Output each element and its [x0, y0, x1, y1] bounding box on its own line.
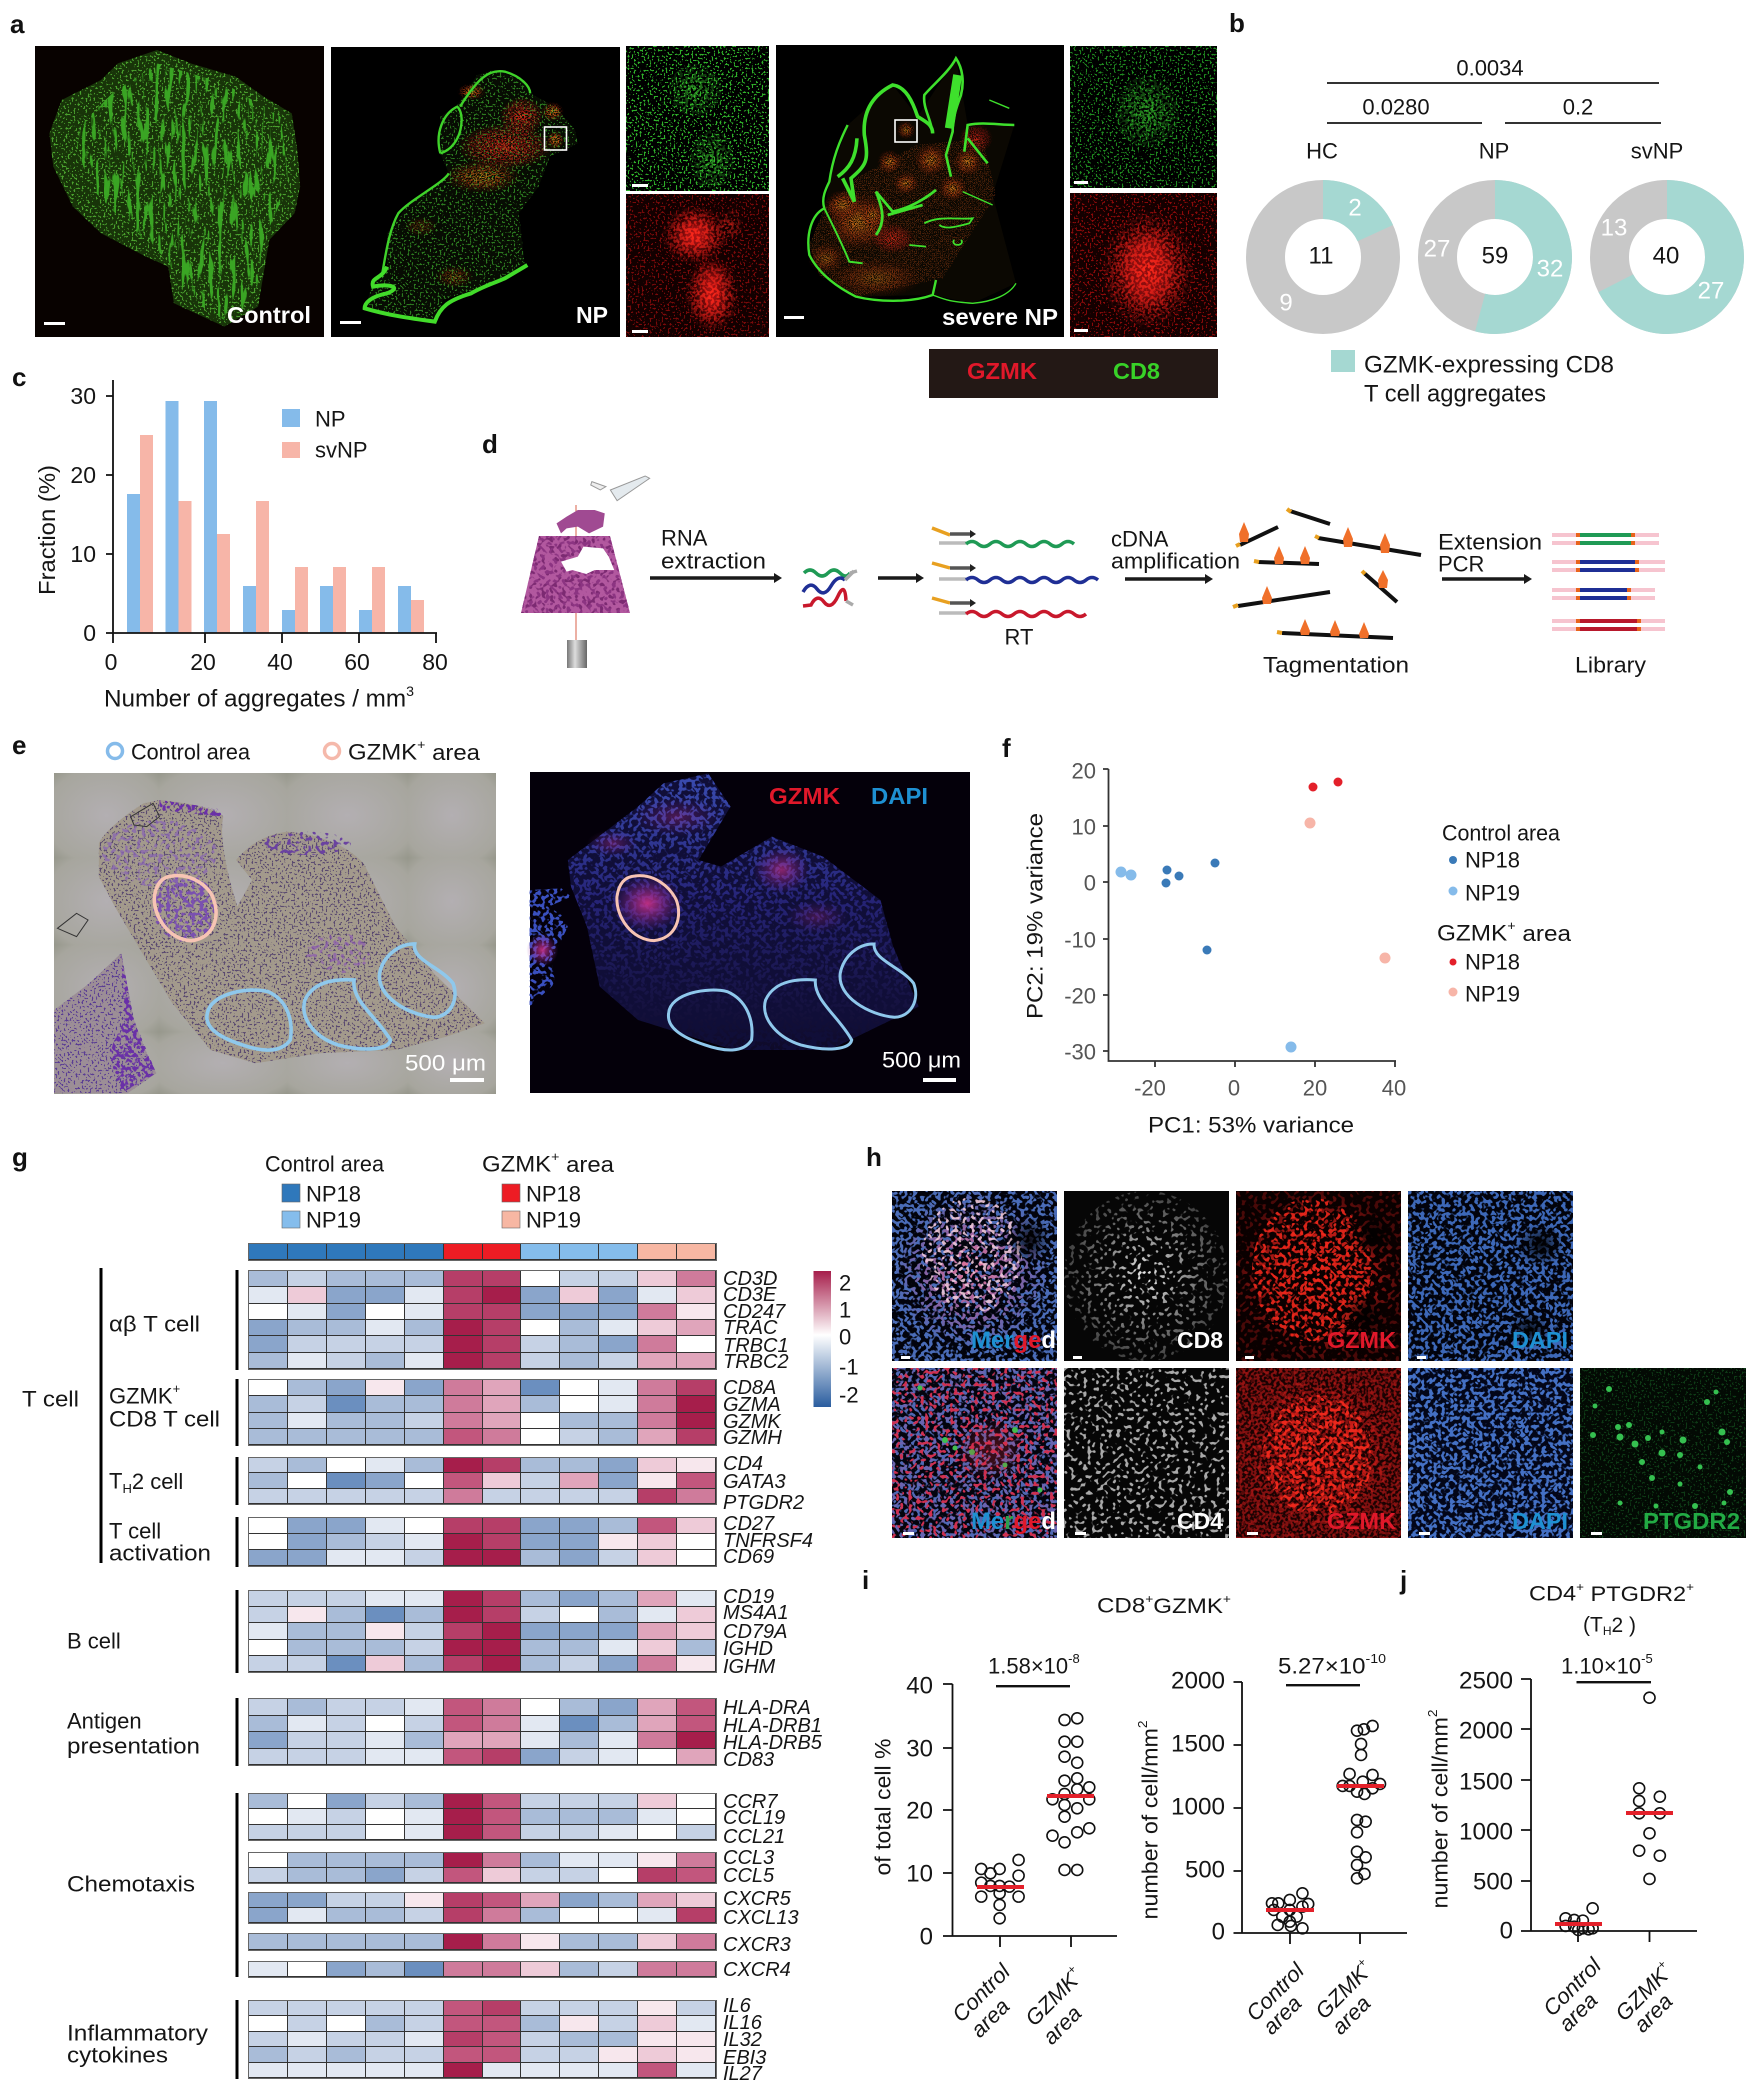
legend: outlined areas: GZMK: [348, 740, 412, 764]
heatmap gene labels: CD83: [723, 1749, 774, 1771]
image: severe NP tissue section: [776, 45, 1064, 337]
scatter plot legend: Control area: [1442, 820, 1561, 846]
dot plot: CD8 GZMK cell density: GZMK: [1310, 1961, 1373, 2024]
legend bar: GZMK CD8: GZMK: [967, 358, 1037, 384]
scatter plot legend: [1437, 820, 1572, 1006]
panel letter i: i: [862, 1565, 869, 1595]
heatmap category labels and bars: activation: [109, 1540, 211, 1566]
heatmap: T cell activation genes: [248, 1517, 717, 1567]
bar chart: fraction vs aggregates: 0: [105, 649, 117, 675]
image: merged CD8 row: [892, 1190, 1057, 1361]
dot plot: CD8 GZMK cell density: 0: [1212, 1918, 1225, 1946]
heatmap gene labels: CCL21: [723, 1826, 785, 1848]
heatmap gene labels: CCL19: [723, 1807, 785, 1829]
heatmap gene labels: TRBC1: [723, 1335, 789, 1357]
scatter plot legend: area: [1516, 920, 1572, 946]
heatmap gene labels: TRBC2: [723, 1351, 789, 1373]
heatmap category labels and bars: Chemotaxis: [67, 1872, 195, 1896]
arrow: RNA extraction: extraction: [661, 548, 766, 574]
arrow: cDNA amplification: cDNA: [1111, 526, 1169, 552]
arrow: RNA extraction: RNA: [661, 526, 708, 550]
dot plot: CD4 PTGDR2 cell density: [1424, 1650, 1697, 2037]
scatter plot: PCA: -20: [1064, 984, 1096, 1008]
label: Tagmentation: Tagmentation: [1263, 652, 1409, 678]
heatmap gene labels: CCR7: [723, 1791, 778, 1813]
dot plot: percentage of total cells: 20: [906, 1798, 933, 1824]
bar chart: fraction vs aggregates: 80: [422, 649, 448, 675]
dot plot: CD4 PTGDR2 cell density: +: [1654, 1957, 1669, 1972]
arrow: Extension PCR: Extension: [1438, 530, 1542, 554]
bar chart: fraction vs aggregates: 3: [406, 683, 414, 699]
scatter plot: PCA: PC1: 53% variance: [1148, 1112, 1354, 1138]
image: control tissue section: [35, 46, 324, 337]
donut chart: svNP: 13: [1601, 214, 1627, 242]
title: CD4 PTGDR2 TH2: [1529, 1580, 1694, 1638]
image: GZMK channel row 1: [1236, 1191, 1401, 1361]
image: GZMK channel row 1: GZMK: [1327, 1327, 1396, 1353]
heatmap gene labels: PTGDR2: [723, 1492, 804, 1514]
title: CD4 PTGDR2 TH2: +: [1686, 1580, 1694, 1594]
image: GZMK DAPI fluorescence section: [526, 772, 970, 1093]
dot plot: CD8 GZMK cell density: +: [1354, 1955, 1369, 1970]
panel letter a: a: [10, 9, 25, 39]
dot plot: CD8 GZMK cell density: number of cell/mm: [1138, 1739, 1162, 1920]
dot plot: percentage of total cells: GZMK: [1020, 1968, 1083, 2031]
label: Merged: Merged: [971, 1326, 1056, 1354]
image: GZMK channel row 2: GZMK: [1327, 1508, 1396, 1534]
scatter plot: PCA: 10: [1072, 814, 1096, 840]
legend: outlined areas: [108, 736, 481, 764]
donut chart: HC: [1266, 138, 1380, 316]
dot plot: CD8 GZMK cell density: area: [1258, 1991, 1306, 2039]
heatmap gene labels: IGHM: [723, 1656, 776, 1678]
dot plot: percentage of total cells: 10: [906, 1860, 933, 1888]
legend: outlined areas: Control area: [131, 740, 251, 764]
heatmap colour scale: [814, 1270, 859, 1408]
scatter plot: PCA: 20: [1072, 758, 1096, 784]
icon: RNA strands: [803, 570, 857, 606]
dot plot: CD8 GZMK cell density: Control: [1241, 1957, 1310, 2026]
heatmap category labels and bars: GZMK: [109, 1384, 173, 1408]
heatmap gene labels: TRAC: [723, 1317, 778, 1339]
heatmap gene labels: CCL3: [723, 1847, 774, 1869]
scatter plot legend: NP19: [1465, 982, 1520, 1006]
image: DAPI channel row 2: [1408, 1368, 1573, 1538]
scale bar label: 500 μm: [882, 1048, 961, 1072]
heatmap gene labels: CD19: [723, 1586, 774, 1608]
heatmap: chemotaxis CXCR4: [248, 1961, 717, 1978]
scatter plot: PCA: -20: [1134, 1076, 1166, 1100]
heatmap colour scale: -2: [839, 1382, 859, 1408]
panel letter g: g: [12, 1142, 28, 1172]
title: CD8 GZMK: GZMK: [1153, 1594, 1223, 1618]
image: PTGDR2 channel: PTGDR2: [1643, 1508, 1740, 1534]
heatmap sample legend: +: [551, 1148, 559, 1164]
heatmap category labels and bars: T cell: [22, 1386, 79, 1412]
heatmap category labels and bars: CD8 T cell: [109, 1406, 220, 1432]
dot plot: CD8 GZMK cell density: 1000: [1171, 1794, 1225, 1820]
heatmap gene labels: HLA-DRB5: [723, 1732, 823, 1754]
donut chart: NP: NP: [1479, 138, 1509, 164]
donut chart: HC: HC: [1306, 138, 1338, 164]
donut legend: T cell aggregates: [1364, 380, 1546, 408]
bar chart: fraction vs aggregates: 40: [267, 649, 293, 675]
image: NP tissue section: [331, 47, 620, 337]
panel letter f: f: [1002, 733, 1011, 763]
arrow: RNA extraction: [650, 526, 782, 583]
donut chart: svNP: 40: [1653, 242, 1679, 270]
arrow: to reverse transcription: [878, 573, 924, 583]
scatter plot: PCA: PC2: 19% variance: [1022, 813, 1048, 1019]
arrow: Extension PCR: [1438, 530, 1542, 584]
icon: laser capture microdissection of tissue: [521, 476, 650, 668]
arrow: cDNA amplification: amplification: [1111, 548, 1240, 574]
image: CD8 channel: CD8: [1177, 1327, 1223, 1353]
title: CD4 PTGDR2 TH2: CD4: [1529, 1582, 1571, 1606]
heatmap category labels and bars: [22, 1268, 238, 2079]
dot plot: CD8 GZMK cell density: 1500: [1171, 1730, 1225, 1758]
donut chart: NP: 59: [1482, 242, 1508, 270]
heatmap gene labels: CXCR3: [723, 1934, 791, 1956]
legend bar: GZMK CD8: [929, 349, 1218, 398]
scatter plot legend: NP19: [1465, 880, 1520, 906]
significance brackets: 0.0280: [1362, 94, 1430, 120]
icon: sequencing library: [1552, 533, 1665, 631]
heatmap category labels and bars: cytokines: [67, 2042, 168, 2068]
panel letter j: j: [1399, 1565, 1407, 1595]
dot plot: CD8 GZMK cell density: [1134, 1650, 1407, 2039]
scatter plot: PCA: -30: [1064, 1040, 1096, 1064]
donut chart: svNP: [1601, 138, 1724, 314]
heatmap category labels and bars: B cell: [67, 1628, 121, 1654]
icon: tagmentation fragments: [1233, 509, 1421, 638]
dot plot: CD4 PTGDR2 cell density: 500: [1473, 1868, 1513, 1896]
scatter plot legend: NP18: [1465, 950, 1520, 974]
image: GZMK channel row 2: [1236, 1368, 1401, 1538]
dot plot: CD4 PTGDR2 cell density: -5: [1641, 1650, 1653, 1666]
donut chart: NP: 32: [1537, 256, 1563, 282]
dot plot: CD8 GZMK cell density: 5.27×10: [1278, 1654, 1358, 1678]
dot plot: CD8 GZMK cell density: 500: [1185, 1856, 1225, 1884]
heatmap: antigen presentation genes: [248, 1698, 717, 1766]
title: CD4 PTGDR2 TH2: H: [1603, 1624, 1612, 1638]
image: DAPI channel row 2: DAPI: [1512, 1508, 1568, 1534]
image: severe NP inset GZMK: [1070, 193, 1217, 337]
dot plot: percentage of total cells: area: [966, 1994, 1014, 2042]
donut chart: HC: 9: [1279, 290, 1293, 316]
heatmap gene labels: CCL5: [723, 1865, 775, 1887]
dot plot: CD8 GZMK cell density: -10: [1365, 1650, 1386, 1666]
dot plot: CD8 GZMK cell density: area: [1327, 1991, 1375, 2039]
image: merged CD4 row: [892, 1368, 1057, 1538]
heatmap gene labels: IL27: [723, 2063, 763, 2085]
image: severe NP inset CD8: [1070, 46, 1217, 188]
dot plot: CD4 PTGDR2 cell density: Control: [1538, 1952, 1607, 2021]
legend bar: GZMK CD8: CD8: [1113, 358, 1160, 384]
significance brackets: 0.0034: [1456, 56, 1524, 80]
title: CD4 PTGDR2 TH2: 2 ): [1612, 1614, 1636, 1636]
heatmap category labels and bars: αβ T cell: [109, 1312, 200, 1336]
heatmap: chemotaxis CXCR5 CXCL13: [248, 1892, 717, 1924]
heatmap: chemotaxis CCR7 CCL19 CCL21: [248, 1793, 717, 1841]
bar chart: fraction vs aggregates: Number of aggregates / mm: [104, 686, 403, 712]
heatmap gene labels: CD3E: [723, 1284, 777, 1306]
dot plot: percentage of total cells: +: [1064, 1962, 1079, 1977]
dot plot: percentage of total cells: 30: [906, 1736, 933, 1762]
heatmap gene labels: HLA-DRA: [723, 1697, 811, 1719]
donut legend: [1331, 350, 1614, 408]
heatmap gene labels: HLA-DRB1: [723, 1715, 822, 1737]
donut chart: NP: [1424, 138, 1563, 314]
heatmap colour scale: -1: [839, 1354, 859, 1380]
title: CD8 GZMK: CD8: [1097, 1594, 1139, 1618]
heatmap gene labels: IGHD: [723, 1638, 773, 1660]
heatmap: B cell genes: [248, 1590, 717, 1673]
heatmap colour scale: 1: [839, 1298, 851, 1322]
dot plot: CD8 GZMK cell density: 2: [1134, 1720, 1150, 1728]
panel letter h: h: [866, 1142, 882, 1172]
bar chart: fraction vs aggregates: 20: [190, 649, 216, 675]
image: NP inset GZMK: [626, 194, 769, 337]
dot plot: percentage of total cells: Control: [947, 1958, 1016, 2027]
bar chart: fraction vs aggregates: Fraction (%): [34, 465, 60, 595]
arrow: Extension PCR: PCR: [1438, 552, 1484, 576]
scatter plot legend: NP18: [1465, 848, 1520, 872]
title: CD4 PTGDR2 TH2: PTGDR2: [1584, 1582, 1686, 1606]
dot plot: CD4 PTGDR2 cell density: GZMK: [1610, 1963, 1673, 2026]
image: PTGDR2 channel: [1580, 1368, 1746, 1538]
dot plot: percentage of total cells: area: [1038, 2001, 1086, 2049]
heatmap category labels and bars: 2 cell: [132, 1468, 183, 1494]
legend: outlined areas: area: [425, 740, 481, 764]
heatmap category labels and bars: T: [109, 1468, 122, 1494]
donut chart: HC: 11: [1309, 242, 1333, 270]
significance brackets: 0.2: [1563, 94, 1593, 120]
heatmap category labels and bars: T cell: [109, 1518, 161, 1544]
heatmap category labels and bars: H: [122, 1480, 132, 1496]
bar chart: fraction vs aggregates: 0: [83, 620, 96, 646]
label: Control: Control: [227, 302, 311, 328]
heatmap gene labels: EBI3: [723, 2047, 766, 2069]
heatmap gene labels: CD27: [723, 1513, 775, 1535]
image: CD4 channel: CD4: [1177, 1508, 1223, 1534]
image: GZMK DAPI fluorescence section: DAPI: [871, 783, 928, 809]
image: GZMK DAPI fluorescence section: GZMK: [769, 783, 840, 809]
heatmap sample legend: NP18: [526, 1182, 581, 1206]
scatter plot: PCA: [1022, 758, 1406, 1138]
heatmap sample legend: NP18: [306, 1182, 361, 1206]
donut chart: svNP: svNP: [1631, 138, 1683, 164]
dot plot: CD8 GZMK cell density: 2000: [1171, 1668, 1225, 1694]
scatter plot: PCA: 0: [1084, 870, 1096, 896]
heatmap gene labels: IL6: [723, 1995, 752, 2017]
label: severe NP: severe NP: [942, 304, 1058, 330]
heatmap gene labels: IL16: [723, 2012, 763, 2034]
heatmap: TH2 cell genes: [248, 1457, 717, 1505]
heatmap gene labels: GATA3: [723, 1471, 786, 1493]
heatmap gene labels: IL32: [723, 2029, 762, 2051]
dot plot: CD4 PTGDR2 cell density: 2: [1424, 1710, 1440, 1717]
dot plot: CD4 PTGDR2 cell density: 0: [1500, 1918, 1513, 1944]
heatmap gene labels: CD247: [723, 1301, 786, 1323]
scale bar label: 500 μm: [405, 1050, 486, 1076]
scatter plot legend: GZMK: [1437, 920, 1501, 946]
scatter plot legend: +: [1507, 918, 1516, 932]
donut chart: svNP: 27: [1698, 278, 1724, 304]
dot plot: percentage of total cells: [870, 1650, 1117, 2049]
heatmap gene labels: MS4A1: [723, 1602, 789, 1624]
heatmap category labels and bars: presentation: [67, 1734, 200, 1758]
title: CD8 GZMK: +: [1145, 1592, 1153, 1606]
dot plot: CD4 PTGDR2 cell density: number of cell/mm: [1428, 1728, 1452, 1908]
heatmap gene labels: CD79A: [723, 1621, 787, 1643]
dot plot: CD4 PTGDR2 cell density: 2000: [1459, 1718, 1513, 1744]
dot plot: CD4 PTGDR2 cell density: 1500: [1459, 1768, 1513, 1796]
heatmap sample legend: NP19: [526, 1208, 581, 1232]
bar chart: fraction vs aggregates: NP: [315, 406, 346, 432]
heatmap gene labels: CD3D: [723, 1268, 777, 1290]
panel letter e: e: [12, 730, 26, 760]
title: CD4 PTGDR2 TH2: (T: [1583, 1614, 1603, 1636]
image: CD8 channel: [1064, 1191, 1229, 1361]
heatmap sample legend: area: [559, 1152, 615, 1176]
image: NP inset CD8: [626, 46, 769, 191]
image: brightfield tissue section: [54, 773, 496, 1094]
panel letter d: d: [482, 429, 498, 459]
label: NP: NP: [576, 302, 608, 328]
title: CD8 GZMK: +: [1223, 1592, 1231, 1606]
legend: outlined areas: +: [417, 736, 425, 752]
panel letter c: c: [12, 362, 26, 392]
bar chart: fraction vs aggregates: 10: [70, 541, 96, 567]
heatmap sample legend: [265, 1148, 615, 1232]
dot plot: percentage of total cells: 1.58×10: [988, 1654, 1068, 1678]
heatmap sample legend: GZMK: [482, 1152, 546, 1176]
scatter plot: PCA: 0: [1228, 1076, 1240, 1100]
label: Library: Library: [1575, 652, 1646, 678]
heatmap gene labels: CD69: [723, 1546, 774, 1568]
dot plot: CD4 PTGDR2 cell density: 1.10×10: [1561, 1654, 1641, 1678]
heatmap gene labels: CXCR5: [723, 1888, 792, 1910]
scatter plot: PCA: 20: [1303, 1076, 1327, 1100]
heatmap category labels and bars: Antigen: [67, 1708, 142, 1734]
heatmap sample legend: Control area: [265, 1152, 385, 1176]
heatmap gene labels: GZMK: [723, 1411, 782, 1433]
bar chart: fraction vs aggregates: 20: [70, 462, 96, 488]
dot plot: CD4 PTGDR2 cell density: area: [1554, 1988, 1602, 2036]
heatmap: chemotaxis CCL3 CCL5: [248, 1852, 717, 1884]
heatmap: alpha-beta T cell genes: [248, 1270, 717, 1370]
dot plot: percentage of total cells: 40: [906, 1672, 933, 1700]
panel letter b: b: [1229, 8, 1245, 38]
dot plot: percentage of total cells: 0: [920, 1924, 933, 1950]
heatmap: GZMK CD8 T cell genes: [248, 1379, 717, 1446]
heatmap: inflammatory cytokine genes: [248, 2000, 717, 2079]
heatmap gene labels: GZMA: [723, 1394, 781, 1416]
icon: reverse transcription products: [932, 528, 1098, 616]
heatmap category labels and bars: +: [173, 1380, 180, 1396]
heatmap gene labels: GZMH: [723, 1427, 782, 1449]
significance brackets: [1327, 56, 1661, 124]
bar chart: fraction vs aggregates: svNP: [315, 438, 368, 462]
scatter plot: PCA: 40: [1382, 1076, 1406, 1100]
dot plot: percentage of total cells: of total cell %: [870, 1738, 896, 1876]
image: CD4 channel: [1064, 1368, 1229, 1538]
heatmap gene labels: CXCR4: [723, 1959, 791, 1981]
dot plot: percentage of total cells: -8: [1068, 1650, 1080, 1666]
arrow: cDNA amplification: [1111, 526, 1240, 584]
heatmap category labels and bars: Inflammatory: [67, 2020, 208, 2046]
image: DAPI channel row 1: DAPI: [1512, 1327, 1568, 1353]
bar chart: fraction vs aggregates: 30: [70, 383, 96, 409]
donut chart: NP: 27: [1424, 236, 1450, 262]
heatmap gene labels: CD4: [723, 1453, 763, 1475]
heatmap gene labels: CD8A: [723, 1377, 776, 1399]
image: DAPI channel row 1: [1408, 1191, 1573, 1361]
donut legend: GZMK-expressing CD8: [1364, 352, 1614, 378]
donut chart: HC: 2: [1348, 194, 1362, 222]
heatmap gene labels: [723, 1268, 823, 2085]
heatmap: chemotaxis CXCR3: [248, 1933, 717, 1951]
heatmap gene labels: TNFRSF4: [723, 1530, 813, 1552]
title: CD4 PTGDR2 TH2: +: [1576, 1580, 1584, 1594]
heatmap sample legend: NP19: [306, 1208, 361, 1232]
heatmap sample annotation bar: [248, 1243, 717, 1261]
dot plot: CD4 PTGDR2 cell density: 1000: [1459, 1818, 1513, 1846]
heatmap colour scale: 2: [839, 1270, 851, 1296]
dot plot: CD4 PTGDR2 cell density: area: [1629, 1989, 1677, 2037]
dot plot: CD4 PTGDR2 cell density: 2500: [1459, 1668, 1513, 1694]
bar chart: fraction vs aggregates: 60: [344, 649, 370, 675]
bar chart: fraction vs aggregates: [34, 380, 448, 712]
heatmap gene labels: CXCL13: [723, 1907, 799, 1929]
label: Merged: Merged: [971, 1508, 1056, 1534]
label: RT: RT: [1005, 624, 1033, 650]
heatmap colour scale: 0: [839, 1324, 851, 1350]
scatter plot: PCA: -10: [1064, 928, 1096, 952]
